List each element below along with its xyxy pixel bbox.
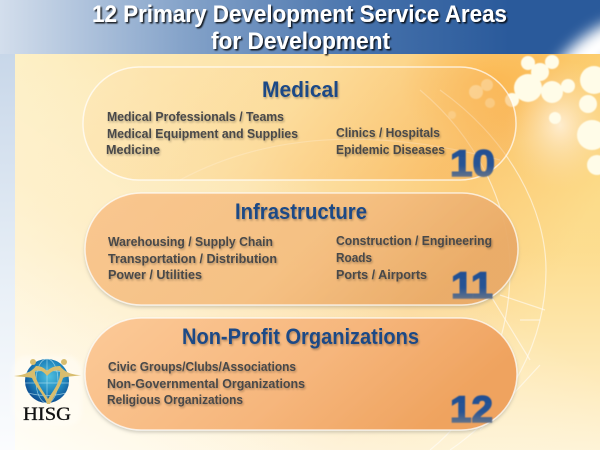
list: non-profit: Civic Groups/Clubs/Associations [108,360,296,374]
panel: non-profit organizations [85,318,517,430]
list: medical left: Medical Equipment and Supplies [107,127,298,141]
list: non-profit [107,360,305,407]
title: 12 Primary Development Service Areas [92,1,507,28]
icon: globe with figures [14,359,81,404]
logo wordmark: HISG [23,404,71,425]
number 12: 12 [450,389,493,430]
list: medical left: Medicine [106,143,160,157]
list: infrastructure left: Transportation / Distribution [108,252,277,266]
list: infrastructure left: Warehousing / Supply Chain [108,235,273,249]
panel: infrastructure [85,193,518,306]
list: medical right [336,126,445,157]
heading: non-profit organizations: Non-Profit Organizations [182,324,419,349]
heading: medical: Medical [262,77,339,102]
number 11: 11 [451,265,493,306]
heading: infrastructure: Infrastructure [235,199,367,224]
list: infrastructure right [336,234,492,282]
list: non-profit: Religious Organizations [107,393,243,407]
logo: HISG [12,356,82,426]
list: infrastructure left: Power / Utilities [108,268,202,282]
title [92,1,507,55]
list: medical left [106,110,298,157]
list: medical right: Epidemic Diseases [336,143,445,157]
list: infrastructure right: Roads [336,251,372,265]
list: medical right: Clinics / Hospitals [336,126,440,140]
list: non-profit: Non-Governmental Organizations [107,377,305,391]
title: for Development [211,28,390,55]
left margin strip [0,54,15,450]
list: infrastructure right: Ports / Airports [336,268,427,282]
panel: medical [83,67,516,184]
number 10: 10 [450,143,495,184]
bokeh lights [448,55,600,175]
list: infrastructure left [108,235,277,282]
header band [0,0,600,54]
list: infrastructure right: Construction / Engineering [336,234,492,248]
list: medical left: Medical Professionals / Teams [107,110,284,124]
